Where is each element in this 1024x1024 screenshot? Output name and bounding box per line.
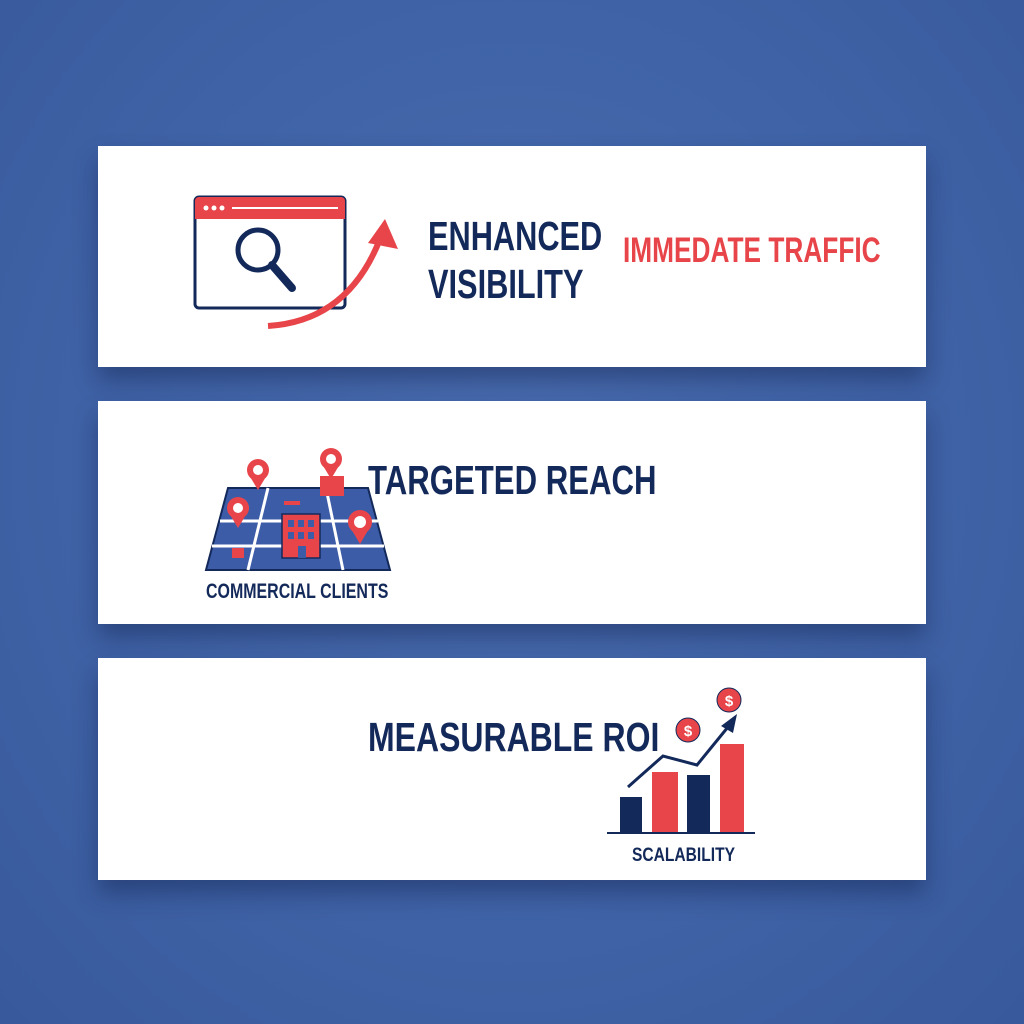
icon: map with pins xyxy=(204,448,392,571)
heading: measurable roi: MEASURABLE ROI xyxy=(368,714,659,760)
heading: enhanced visibility: VISIBILITY xyxy=(428,261,583,307)
label: scalability: SCALABILITY xyxy=(632,845,735,866)
chart: growth bars: $ xyxy=(725,693,734,710)
heading: targeted reach: TARGETED REACH xyxy=(368,457,657,503)
panel: targeted reach xyxy=(98,401,926,624)
chart: growth bars xyxy=(607,688,755,834)
text: immediate traffic: IMMEDATE TRAFFIC xyxy=(623,231,881,270)
panel: measurable roi xyxy=(98,658,926,880)
chart: growth bars: $ xyxy=(684,723,693,740)
panel: enhanced visibility xyxy=(98,146,926,367)
label: commercial clients: COMMERCIAL CLIENTS xyxy=(206,580,388,603)
icon: browser search with arrow xyxy=(194,196,398,329)
heading: enhanced visibility xyxy=(428,213,602,307)
heading: enhanced visibility: ENHANCED xyxy=(428,213,602,259)
